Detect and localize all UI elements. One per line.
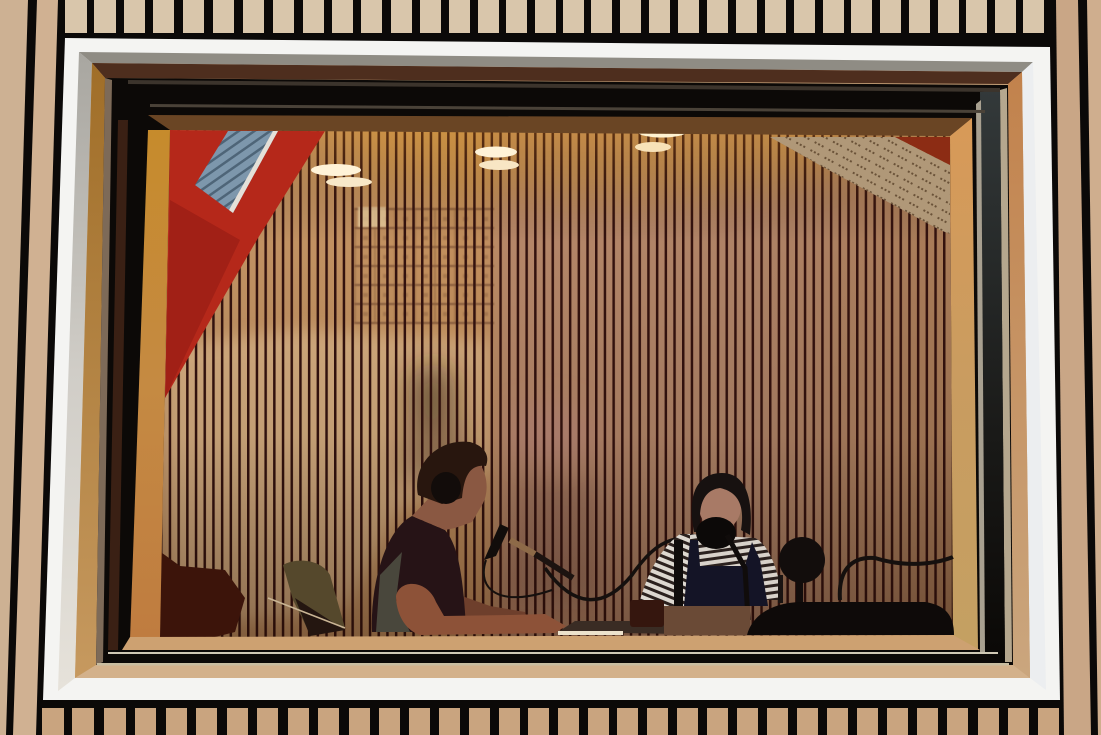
boom arm [510,540,535,554]
thin cable loop [484,560,552,597]
green chair reflection [268,561,345,636]
hair and headset [692,473,751,535]
headphone cup [431,472,461,504]
chest stripes [690,534,782,600]
slatted back wall [160,130,960,640]
left oak window reveal [130,130,170,640]
reflection: poster grid [354,208,494,324]
mic stand [727,535,748,620]
desk equipment [558,600,954,635]
right wall slats [1056,0,1101,735]
thick cable [545,538,682,600]
man with headphones [372,442,566,635]
foam mic [484,524,509,560]
overalls [684,540,768,606]
acoustic ceiling panel [770,137,950,234]
room interior [160,130,953,637]
neck and face [412,460,487,530]
warm glow from ceiling [372,132,846,201]
oak window sill [122,635,980,650]
desk surface [560,621,664,634]
ceiling lights [311,134,684,187]
dark strap [674,540,683,630]
skylight pane [195,131,278,213]
dark red armchair reflection [158,550,245,637]
mic screen [696,517,736,549]
left striped sleeve [640,534,695,610]
ceiling soffit [148,115,972,136]
pop filter [778,537,825,604]
reflection: bright poster mark [358,207,386,227]
oak inner frame [75,63,1030,678]
microphone and cable [484,524,682,600]
top wall slats [65,0,1044,33]
woman with headphones [640,473,782,630]
t-shirt [372,516,466,632]
reflection: figures [405,363,600,600]
shirt print [376,552,410,632]
reflection: pale cloudy wall [162,325,494,624]
right oak window reveal [950,118,978,650]
hair [417,442,487,504]
far arm [462,596,530,628]
face [699,484,741,530]
bottom wall slats [42,708,1059,735]
near arm [396,584,566,635]
dark window recess [96,78,1013,666]
red skylight wall [165,130,325,398]
left wall slats [0,0,58,735]
right mic cable [840,557,953,600]
